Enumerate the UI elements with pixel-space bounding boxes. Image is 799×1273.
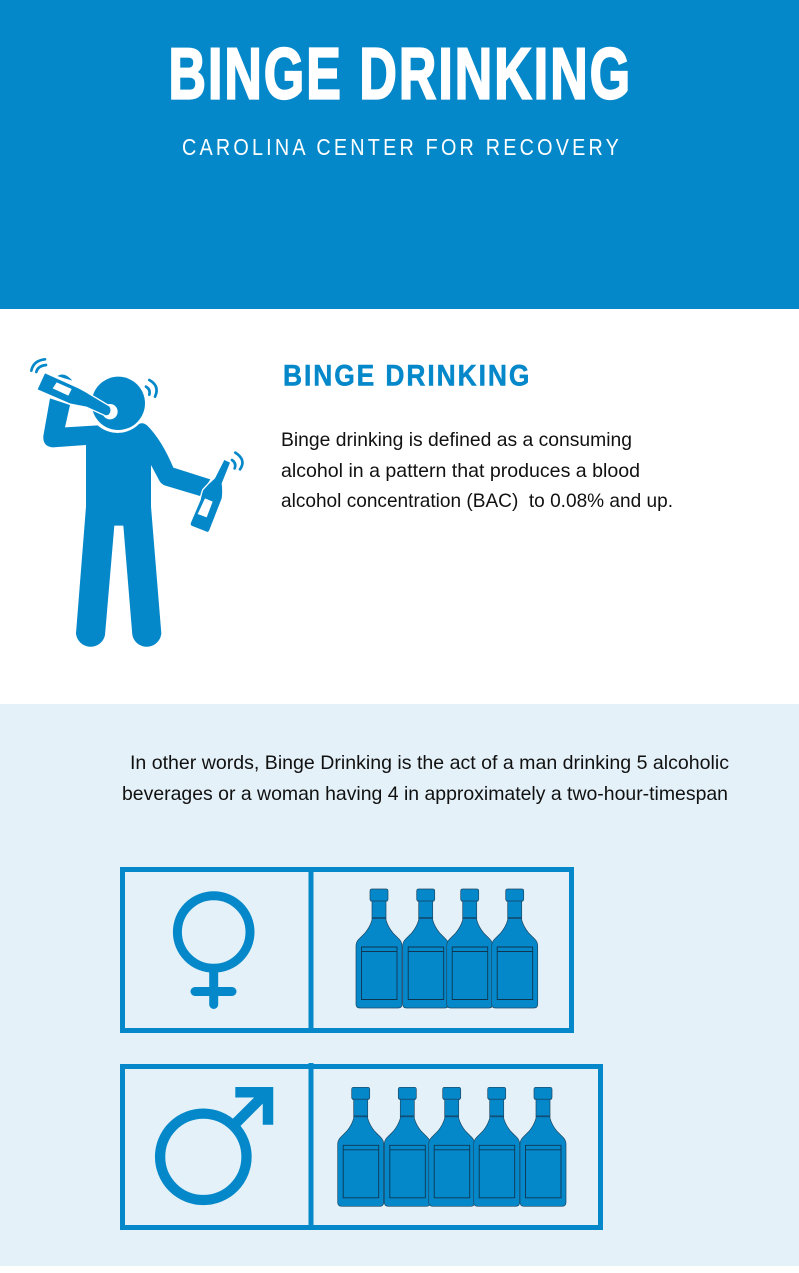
held bottle label (198, 498, 213, 517)
subtitle: CAROLINA CENTER FOR RECOVERY (182, 135, 619, 160)
explanation text: In other words, Binge Drinking is the act of a man drinking 5 alcoholic (130, 752, 729, 774)
table frame (122, 1063, 600, 1228)
four bottles (356, 889, 538, 1008)
definition text: alcohol concentration (BAC) to 0.08% and up. (281, 490, 673, 512)
raised bottle label (53, 382, 72, 396)
table frame (122, 870, 572, 1030)
hand cap above bottle (57, 374, 72, 381)
figure body (43, 398, 210, 647)
panel: man limit (122, 1063, 600, 1228)
section heading: BINGE DRINKING (283, 358, 529, 392)
motion lines (31, 359, 242, 469)
held bottle (191, 460, 230, 532)
panel: woman limit (122, 870, 572, 1030)
title: BINGE DRINKING (168, 34, 630, 114)
header band (0, 0, 799, 309)
definition text (281, 429, 673, 512)
head (92, 377, 145, 430)
white ring at bottle mouth (102, 404, 118, 419)
icon: male symbol (160, 1092, 268, 1200)
raised bottle (38, 373, 111, 415)
definition text: Binge drinking is defined as a consuming (281, 429, 632, 451)
five bottles (338, 1087, 566, 1206)
explanation text (122, 752, 729, 805)
definition text: alcohol in a pattern that produces a blood (281, 460, 640, 482)
light blue panel (0, 704, 799, 1266)
icon: person drinking from bottle (31, 359, 242, 647)
explanation text: beverages or a woman having 4 in approximately a two-hour-timespan (122, 783, 728, 805)
icon: female symbol (177, 896, 250, 1004)
